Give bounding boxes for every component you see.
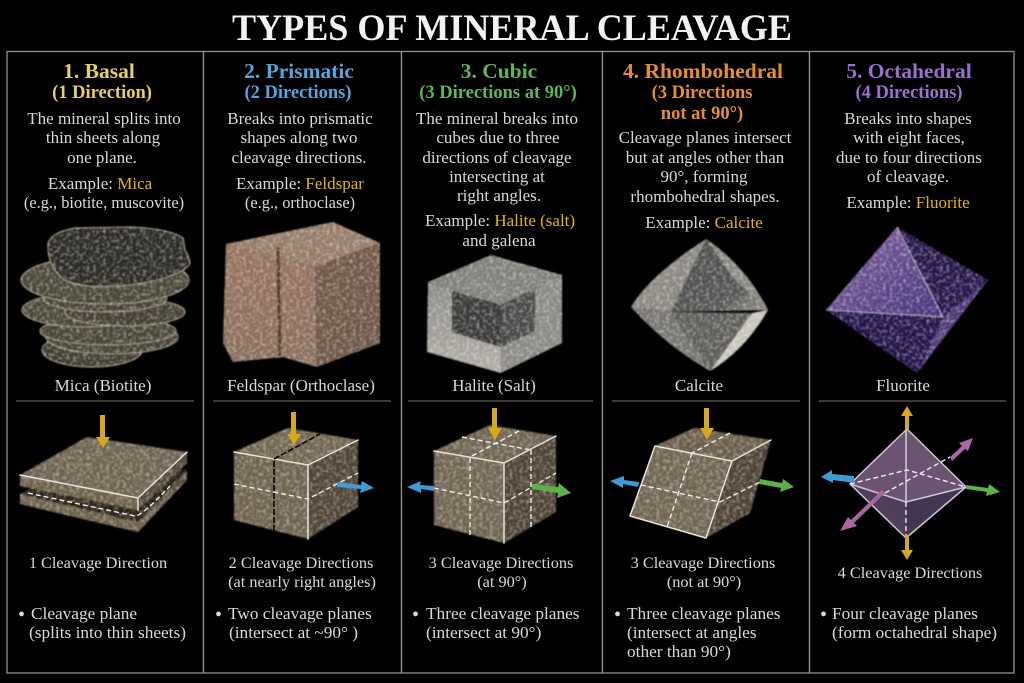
- description: cubic: directions of cleavage: [422, 148, 572, 167]
- description: rhombohedral: [619, 128, 792, 206]
- diagram: rhombohedral cleavage: [610, 408, 794, 538]
- description: octahedral: [836, 109, 982, 186]
- bullets: cubic: •: [412, 604, 419, 626]
- block: [630, 428, 771, 538]
- heading: cubic: 3. Cubic: [461, 59, 537, 83]
- panel: prismatic: [204, 52, 402, 673]
- diagram caption: rhombohedral: (not at 90°): [667, 572, 741, 591]
- specimen label: fluorite: Fluorite: [876, 376, 930, 395]
- heading: basal: 1. Basal: [63, 59, 135, 83]
- lower slab: [20, 460, 187, 532]
- description: octahedral: Breaks into shapes: [844, 109, 972, 128]
- bullets: rhombohedral: •: [614, 604, 621, 626]
- specimen label: calcite: Calcite: [675, 376, 723, 395]
- diagram: cubic cleavage: [407, 408, 571, 543]
- diagram: prismatic cleavage: [234, 412, 374, 539]
- description: rhombohedral: Cleavage planes intersect: [619, 128, 792, 147]
- interior planes: [850, 457, 966, 538]
- cleavage planes: [434, 431, 556, 535]
- bullets: cubic: [412, 604, 580, 642]
- subheading: octahedral: (4 Directions): [855, 83, 963, 103]
- arrow: right: [966, 484, 1000, 496]
- arrow: diagonal: [840, 438, 973, 531]
- specimen label: halite: Halite (Salt): [452, 376, 536, 395]
- specimen label: feldspar: Feldspar (Orthoclase): [227, 376, 375, 395]
- diagram caption: octahedral: 4 Cleavage Directions: [838, 563, 982, 582]
- diagram caption: cubic: 3 Cleavage Directions: [429, 553, 573, 572]
- description: basal: The mineral splits into: [27, 109, 181, 128]
- description: rhombohedral: 90°, forming: [660, 167, 748, 186]
- example: halite: Example: Halite (salt): [425, 211, 575, 230]
- dark cleavage plane: [274, 434, 320, 531]
- diagram caption: basal: 1 Cleavage Direction: [29, 553, 167, 572]
- arrow: left: [821, 470, 854, 483]
- example: fluorite: Example: Fluorite: [846, 193, 970, 212]
- octahedron: [850, 429, 966, 538]
- heading: rhombohedral: 4. Rhombohedral: [623, 59, 783, 83]
- panel: octahedral: [810, 52, 1014, 673]
- bullets: rhombohedral: Three cleavage planes: [627, 604, 781, 623]
- bullets: prismatic: (intersect at ~90° ): [229, 623, 358, 642]
- example: feldspar: Example: Feldspar: [236, 174, 364, 193]
- heading: octahedral: 5. Octahedral: [846, 59, 972, 83]
- panel: basal: [7, 52, 204, 673]
- bullets: basal: Cleavage plane: [31, 604, 137, 623]
- arrow: right: [759, 479, 794, 492]
- diagram caption: cubic: [429, 553, 573, 591]
- bullets: octahedral: Four cleavage planes: [832, 604, 978, 623]
- example: halite: [425, 211, 575, 250]
- diagram caption: cubic: (at 90°): [477, 572, 527, 591]
- title: TYPES OF MINERAL CLEAVAGE: [232, 8, 792, 49]
- bullets: prismatic: Two cleavage planes: [228, 604, 372, 623]
- light cleavage plane: [234, 473, 358, 499]
- subheading: rhombohedral: (3 Directions: [652, 83, 752, 103]
- arrow: down: [287, 412, 301, 445]
- specimen: feldspar: [223, 222, 380, 367]
- arrow: up and down: [901, 406, 913, 560]
- example: calcite: Example: Calcite: [645, 213, 763, 232]
- description: cubic: intersecting at: [449, 167, 545, 186]
- panel: rhombohedral: [602, 52, 810, 673]
- description: basal: [27, 109, 181, 167]
- description: basal: one plane.: [67, 148, 137, 167]
- diagram caption: rhombohedral: 3 Cleavage Directions: [631, 553, 775, 572]
- bullets: octahedral: [820, 604, 997, 642]
- bullets: rhombohedral: (intersect at angles: [627, 623, 757, 642]
- diagram caption: prismatic: (at nearly right angles): [228, 572, 376, 591]
- specimen label: mica: Mica (Biotite): [55, 376, 151, 395]
- description: prismatic: [227, 109, 373, 167]
- bullets: prismatic: •: [215, 604, 222, 626]
- arrow: right: [532, 483, 571, 498]
- bullets: cubic: Three cleavage planes: [426, 604, 580, 623]
- example: mica: Example: Mica: [48, 174, 153, 193]
- bullets: cubic: (intersect at 90°): [426, 623, 541, 642]
- description: octahedral: of cleavage.: [867, 167, 949, 186]
- upper slab: [20, 437, 187, 510]
- example: feldspar: [236, 174, 364, 212]
- block: [234, 428, 358, 539]
- subheading: rhombohedral: [652, 83, 752, 124]
- bullets: octahedral: (form octahedral shape): [832, 623, 997, 642]
- bullets: rhombohedral: other than 90°): [627, 642, 731, 661]
- specimen: calcite: [631, 239, 768, 371]
- description: cubic: right angles.: [457, 186, 541, 205]
- arrow: down: [488, 408, 502, 440]
- bullets: prismatic: [215, 604, 372, 642]
- example: mica: (e.g., biotite, muscovite): [24, 193, 184, 212]
- bullets: basal: [18, 604, 186, 642]
- diagram: octahedral cleavage: [821, 406, 1000, 560]
- cleavage plane dash: [28, 486, 170, 516]
- example: mica: [24, 174, 184, 212]
- description: cubic: cubes due to three: [436, 128, 560, 147]
- diagram caption: prismatic: 2 Cleavage Directions: [229, 553, 373, 572]
- bullets: basal: (splits into thin sheets): [29, 623, 186, 642]
- subheading: basal: (1 Direction): [52, 83, 152, 103]
- example: feldspar: (e.g., orthoclase): [245, 193, 355, 212]
- subheading: cubic: (3 Directions at 90°): [419, 83, 577, 103]
- description: prismatic: Breaks into prismatic: [227, 109, 373, 128]
- description: rhombohedral: but at angles other than: [626, 148, 785, 167]
- specimen: halite: [427, 255, 562, 373]
- bullets: octahedral: •: [820, 604, 827, 626]
- specimen: fluorite: [826, 227, 988, 373]
- example: halite: and galena: [462, 231, 536, 250]
- description: prismatic: cleavage directions.: [232, 148, 366, 167]
- arrow: down: [96, 415, 110, 448]
- description: cubic: [416, 109, 578, 205]
- block: [434, 425, 556, 543]
- bullets: basal: •: [18, 604, 25, 626]
- diagram caption: rhombohedral: [631, 553, 775, 591]
- arrow: right: [337, 481, 374, 493]
- specimen: mica stack: [21, 227, 190, 367]
- description: octahedral: due to four directions: [836, 148, 982, 167]
- heading: prismatic: 2. Prismatic: [244, 59, 354, 83]
- panel: cubic: [402, 52, 602, 673]
- description: prismatic: shapes along two: [240, 128, 358, 147]
- cleavage planes: [641, 433, 760, 527]
- diagram: basal cleavage: [20, 415, 187, 532]
- arrow: left: [407, 481, 434, 493]
- description: rhombohedral: rhombohedral shapes.: [630, 187, 780, 206]
- subheading: rhombohedral: not at 90°): [661, 104, 743, 124]
- description: octahedral: with eight faces,: [853, 128, 965, 147]
- diagram caption: prismatic: [228, 553, 376, 591]
- description: cubic: The mineral breaks into: [416, 109, 578, 128]
- description: basal: thin sheets along: [46, 128, 161, 147]
- bullets: rhombohedral: [614, 604, 781, 661]
- subheading: prismatic: (2 Directions): [244, 83, 352, 103]
- arrow: down: [700, 408, 714, 440]
- arrow: left: [610, 476, 639, 488]
